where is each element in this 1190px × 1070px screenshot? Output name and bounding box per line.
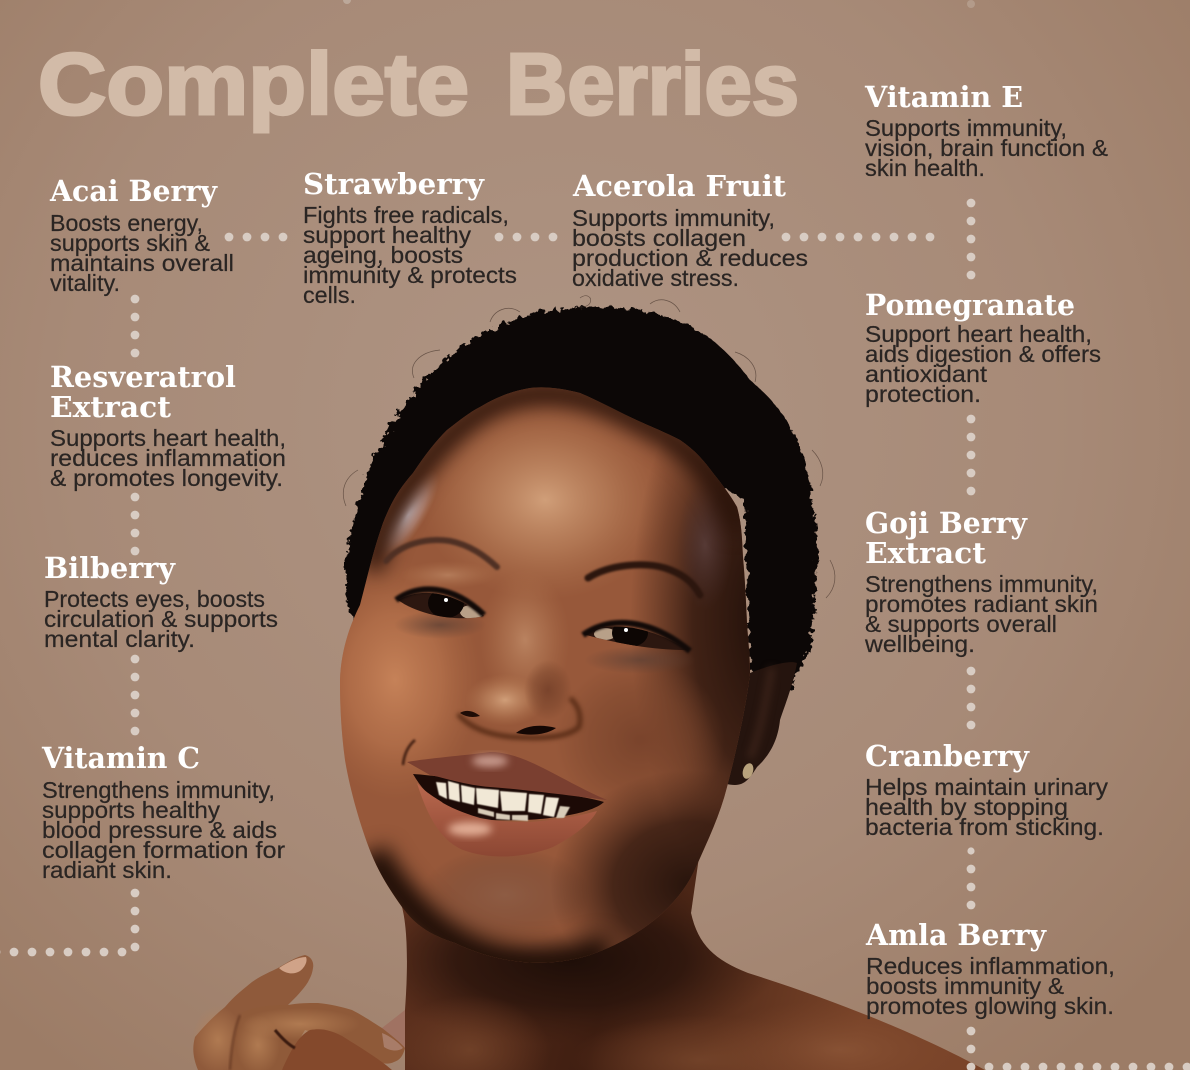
description [865,774,1109,840]
description: vision, brain function & [865,135,1108,161]
description: immunity & protects [303,262,517,288]
smile [403,740,607,856]
second nail [382,1033,403,1051]
title: Complete [38,36,469,133]
description: maintains overall [50,250,234,276]
hair [343,296,835,690]
description: boosts collagen [572,225,746,251]
description: blood pressure & aids [42,817,277,843]
portrait of smiling woman [192,296,985,1070]
description: reduces inflammation [50,445,286,471]
heading: Acerola Fruit [572,169,787,203]
heading: Pomegranate [865,288,1075,322]
panel: Cranberry [865,739,1109,840]
hand [192,955,405,1070]
heading [865,506,1028,570]
eyebrows [386,540,700,595]
heading [50,360,236,424]
panel: Vitamin C [41,741,285,883]
nail [279,957,307,973]
heading: Acai Berry [49,174,218,208]
description: boosts immunity & [866,973,1064,999]
heading: Vitamin E [864,80,1023,114]
description: supports skin & [50,230,210,256]
description: bacteria from sticking. [865,814,1104,840]
description: aids digestion & offers [865,341,1101,367]
ring finger [282,1029,392,1070]
description: Helps maintain urinary [865,774,1109,800]
heading: Extract [865,536,987,570]
description [864,571,1098,657]
description: Boosts energy, [50,210,203,236]
description: Fights free radicals, [303,202,509,228]
description: health by stopping [865,794,1068,820]
heading: Goji Berry [865,506,1028,540]
panel: Acerola Fruit [572,169,808,291]
description [303,202,517,308]
description: Strengthens immunity, [42,777,275,803]
description [866,953,1115,1019]
heading: Amla Berry [865,918,1047,952]
heading: Strawberry [303,167,485,201]
smile crease [403,740,415,765]
dotted connector lines [0,0,975,956]
description: protection. [865,381,981,407]
title: Berries [506,36,799,133]
description: promotes glowing skin. [866,993,1114,1019]
face [340,387,750,963]
description: collagen formation for [42,837,285,863]
description: Supports immunity, [572,205,775,231]
dots over shoulder [967,1027,1190,1070]
description: vitality. [50,270,120,296]
nose [458,660,580,738]
description [44,586,278,652]
description: Protects eyes, boosts [44,586,265,612]
description [865,115,1108,181]
panel: Amla Berry [865,918,1115,1019]
description: production & reduces [572,245,808,271]
description: circulation & supports [44,606,278,632]
description: mental clarity. [44,626,195,652]
panel: Resveratrol Extract [50,360,286,491]
description: skin health. [865,155,985,181]
upper lip [407,752,607,800]
earring [741,762,755,780]
heading: Vitamin C [41,741,200,775]
left eye [396,588,484,619]
description: Supports immunity, [865,115,1067,141]
description: ageing, boosts [303,242,463,268]
jaw shadow [371,853,610,963]
description: Strengthens immunity, [865,571,1098,597]
under eye [400,614,478,637]
description [42,777,285,883]
heading: Extract [50,390,172,424]
panel: Strawberry [303,167,517,308]
right eye [583,619,690,651]
panel: Pomegranate [865,288,1101,407]
description: antioxidant [865,361,988,387]
description: & promotes longevity. [50,465,283,491]
pointing finger [193,955,313,1070]
description: oxidative stress. [572,265,739,291]
teeth [436,781,570,821]
heading: Resveratrol [50,360,236,394]
panel: Goji Berry Extract [864,506,1098,657]
description: support healthy [303,222,472,248]
description: Reduces inflammation, [866,953,1115,979]
ear [716,662,797,785]
description: Supports heart health, [50,425,286,451]
panel: Vitamin E [864,80,1108,181]
hairline shadow [372,393,740,570]
title [38,36,799,133]
heading: Cranberry [865,739,1030,773]
description: Support heart health, [865,321,1092,347]
middle finger [230,1003,405,1070]
skin behind fingers [382,1010,405,1050]
description: wellbeing. [864,631,975,657]
description [572,205,808,291]
description [865,321,1101,407]
description: supports healthy [42,797,221,823]
panel: Acai Berry [49,174,234,296]
panel: Bilberry [44,551,278,652]
description: cells. [303,282,356,308]
description [50,210,234,296]
description [50,425,286,491]
description: radiant skin. [42,857,172,883]
mouth interior [413,774,604,820]
heading: Bilberry [44,551,176,585]
description: & supports overall [865,611,1057,637]
lower lip [417,783,597,856]
neck and shoulder [402,862,985,1070]
description: promotes radiant skin [865,591,1098,617]
